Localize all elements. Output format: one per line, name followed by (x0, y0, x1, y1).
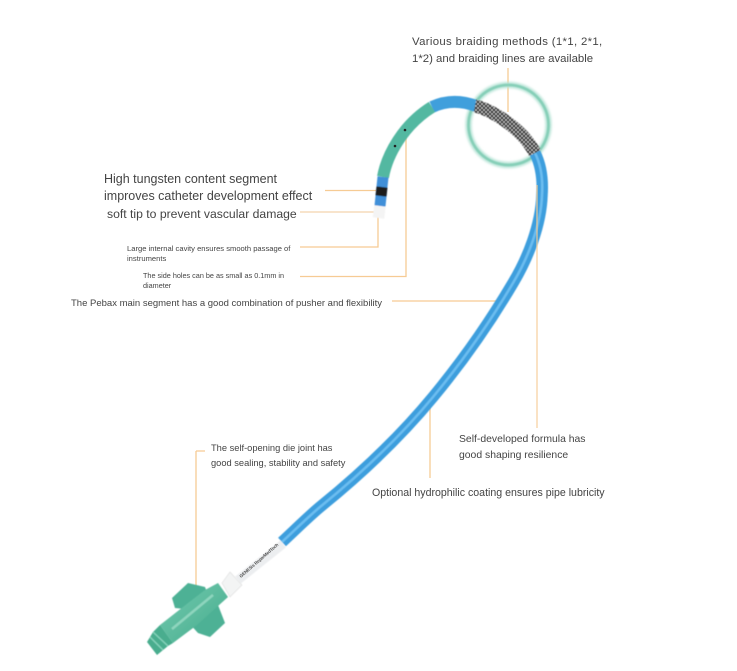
text: self-developed formula: good shaping resilience (459, 450, 568, 461)
text: internal cavity: Large internal cavity ensures smooth passage of (127, 244, 290, 253)
text: side holes: diameter (143, 281, 171, 290)
shaft highlight (282, 153, 542, 542)
text: side holes (143, 271, 284, 290)
highlight circle (468, 85, 548, 165)
text: Pebax main segment: The Pebax main segment has a good combination of pusher and flexibility (71, 298, 382, 309)
formula leader line (536, 185, 538, 428)
blue distal segment (432, 102, 476, 107)
text: braiding methods: 1*2) and braiding lines are available (412, 53, 593, 65)
text: braiding methods: Various braiding methods (1*1, 2*1, (412, 36, 603, 48)
text: internal cavity (127, 244, 290, 263)
text: soft tip: soft tip to prevent vascular damage (107, 207, 297, 221)
green distal segment (383, 107, 432, 177)
text: tungsten segment: improves catheter development effect (104, 189, 312, 203)
text: braiding methods (412, 36, 603, 65)
blue tip segment (380, 177, 383, 206)
text: self-developed formula: Self-developed formula has (459, 434, 586, 445)
text: self-opening die joint: The self-opening die joint has (211, 443, 332, 453)
text: self-opening die joint (211, 443, 346, 468)
text: tungsten segment: High tungsten content segment (104, 172, 277, 186)
text: internal cavity: instruments (127, 254, 166, 263)
text: side holes: The side holes can be as small as 0.1mm in (143, 271, 284, 280)
wings (172, 583, 210, 610)
thread (147, 625, 173, 655)
shaft marking: GENESis ReparMedTech (238, 542, 280, 579)
leader lines (196, 68, 508, 597)
text: self-developed formula (459, 434, 586, 461)
soft white tip (378, 206, 380, 218)
side holes (394, 129, 406, 147)
white shaft sleeve (238, 544, 283, 580)
braided section (475, 106, 535, 153)
hub body (160, 583, 228, 643)
text: tungsten segment (104, 172, 312, 203)
text: self-opening die joint: good sealing, stability and safety (211, 458, 345, 468)
text: hydrophilic coating: Optional hydrophilic coating ensures pipe lubricity (372, 487, 605, 499)
catheter body (238, 102, 542, 580)
radiopaque band (381, 187, 382, 196)
main blue shaft (282, 153, 542, 542)
hub connector (147, 572, 242, 655)
strain relief (222, 572, 242, 597)
